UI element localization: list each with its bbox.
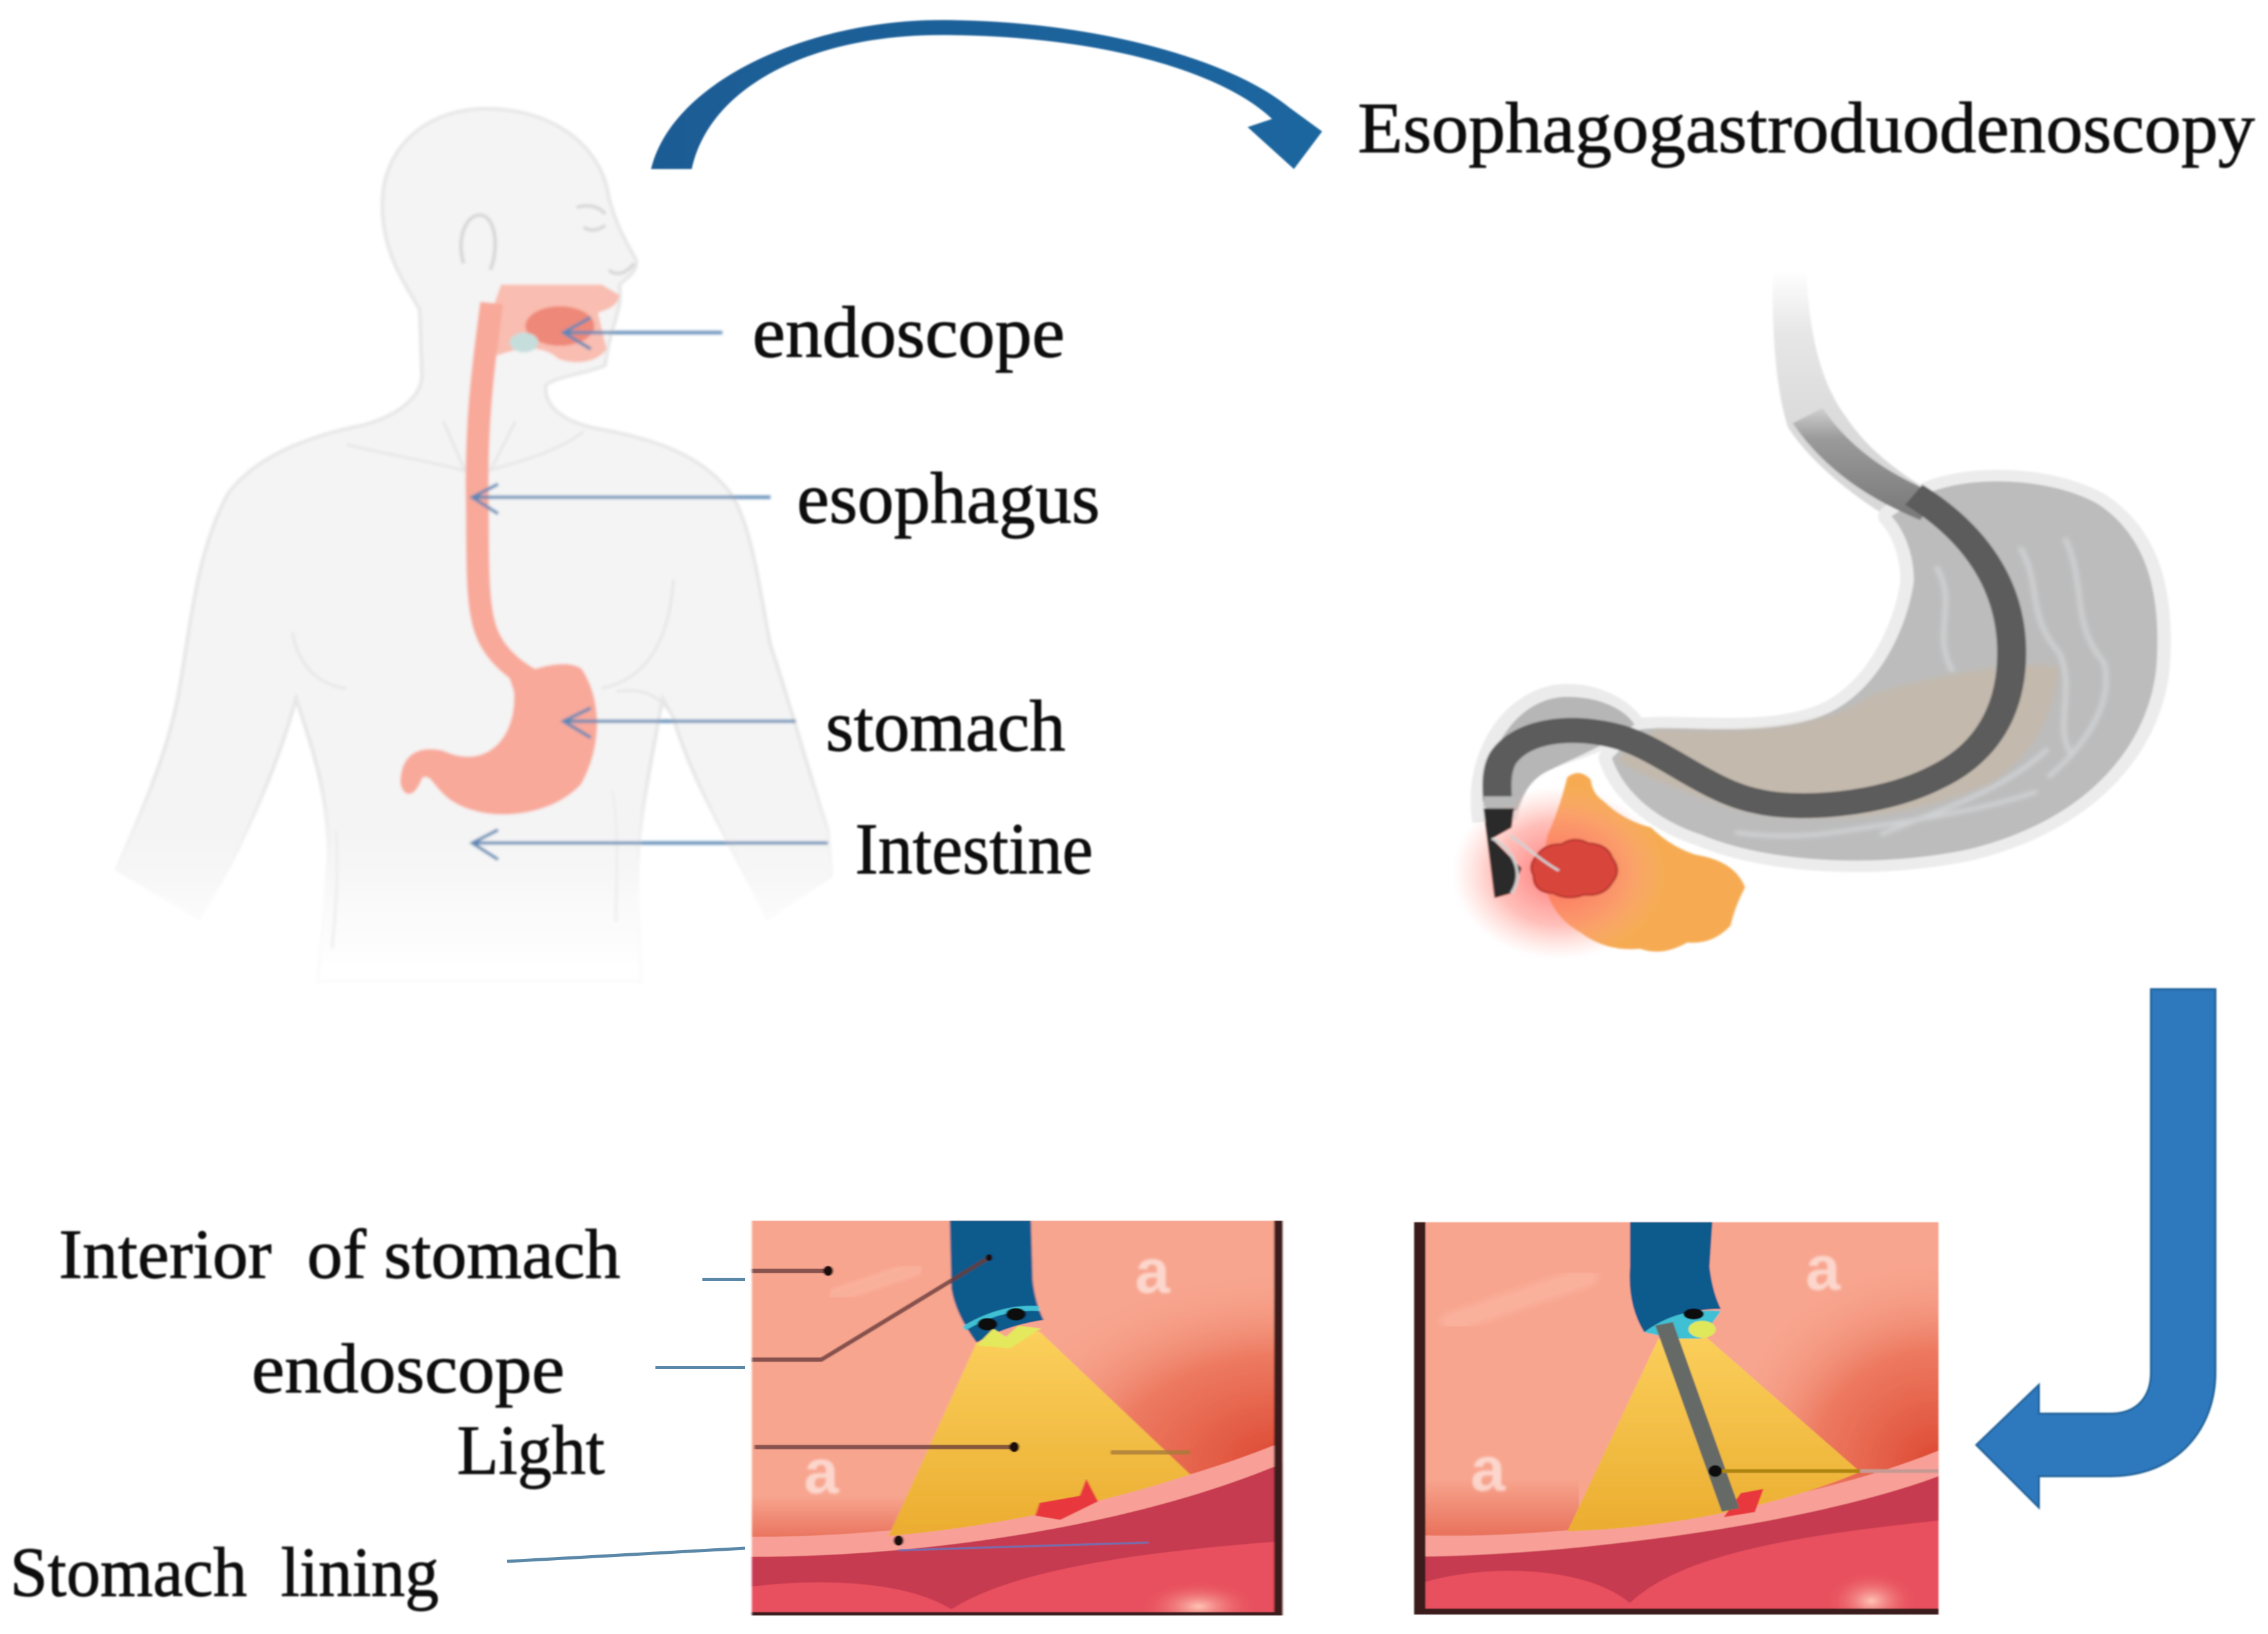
endoscope body (1629, 1222, 1721, 1332)
label: endoscope: endoscope (752, 292, 1065, 373)
panel: human body anatomy (116, 109, 831, 981)
endoscope lens glow (1645, 1310, 1721, 1339)
panel: stomach with endoscope (1453, 270, 2157, 959)
bleeding lesion (1035, 1479, 1098, 1520)
snare (1492, 836, 1559, 893)
lining band (1425, 1451, 1939, 1556)
watermark letters (804, 1233, 1841, 1507)
title: esophagogastroduodenoscopy: Esophagogastroduodenoscopy (1358, 88, 2255, 168)
stomach (401, 664, 597, 814)
panel: endoscope view left (752, 1221, 1283, 1615)
label: stomach: stomach (826, 686, 1065, 767)
endoscope body (950, 1221, 1044, 1343)
gastric contents tan (1618, 665, 2059, 818)
red glow (1453, 787, 1665, 959)
blue leader over lining (898, 1543, 1148, 1550)
endoscope lenses (964, 1308, 1041, 1349)
endoscope tube (1497, 495, 2012, 806)
background mucosa (752, 1221, 1283, 1615)
stomach light folds (1735, 538, 2106, 836)
shaded wall (922, 1272, 1283, 1558)
highlight (1123, 1578, 1274, 1615)
curved arrow: to esophagogastroduodenoscopy (651, 20, 1322, 169)
annotation dot (1708, 1465, 1722, 1477)
arrow: stomach (563, 708, 796, 737)
lining band (752, 1442, 1283, 1557)
dark frame (752, 1221, 1283, 1615)
annotation dots (823, 1254, 1019, 1546)
lens black (1683, 1308, 1704, 1320)
stomach body (1612, 481, 2157, 861)
label: stomach lining: Stomach lining (10, 1534, 439, 1611)
pancreas (1544, 773, 1745, 952)
esophagus dark core (1808, 416, 1928, 506)
endoscope collar (1484, 796, 1517, 807)
faint streak (838, 1269, 914, 1295)
watermark letters: a (1805, 1233, 1841, 1303)
shaded wall (1711, 1254, 1939, 1508)
duodenal wall (1485, 697, 1634, 811)
lower left shading (752, 1496, 1003, 1544)
esophagus halo (1773, 270, 1936, 521)
crimson band (752, 1463, 1283, 1609)
label: esophagus: esophagus (797, 458, 1100, 539)
stomach halo (1612, 481, 2157, 861)
body silhouette (116, 109, 831, 981)
arrow: esophagus (472, 484, 771, 514)
long bent arrow (1976, 989, 2215, 1508)
ear and eye (461, 206, 634, 274)
leader line over tissue (1860, 1469, 1939, 1473)
label: light: Light (457, 1412, 605, 1489)
leader: stomach lining (507, 1548, 745, 1561)
label: endoscope lower: endoscope (252, 1330, 565, 1408)
biopsy tool (1664, 1323, 1730, 1510)
leader: endoscope (655, 1366, 745, 1369)
body contour lines (292, 421, 674, 948)
label: intestine: Intestine (855, 809, 1093, 890)
background mucosa (1414, 1222, 1939, 1614)
duodenum halo (1470, 684, 1646, 823)
annotation leader lines (752, 1258, 1190, 1452)
panel: endoscope view right (1414, 1222, 1939, 1615)
arrow: intestine (472, 830, 828, 860)
lower left shading (1425, 1478, 1579, 1542)
label: interior of stomach: Interior of stomach (59, 1216, 620, 1293)
throat and mouth (493, 284, 620, 362)
light cone (888, 1331, 1190, 1536)
watermark letters: a (804, 1437, 839, 1507)
leader line (1718, 1469, 1860, 1473)
arrow: endoscope (563, 317, 722, 349)
pharynx detail (510, 332, 538, 352)
highlight streak (1454, 1277, 1584, 1322)
endoscope tip (1484, 808, 1521, 898)
stomach tissue (752, 1442, 1283, 1615)
crimson band (1425, 1476, 1939, 1603)
watermark letters: a (1470, 1434, 1506, 1504)
watermark letters: a (1135, 1236, 1171, 1307)
dark frame (1414, 1222, 1939, 1615)
leader: interior of stomach (702, 1278, 745, 1281)
lens yellow (1688, 1321, 1716, 1338)
esophagus (477, 303, 530, 679)
bleeding lesion (1724, 1489, 1763, 1517)
tumor (1531, 840, 1617, 897)
tongue (525, 306, 595, 346)
highlight (1820, 1571, 1922, 1610)
stomach tissue (1425, 1453, 1939, 1614)
light cone (1568, 1330, 1860, 1531)
